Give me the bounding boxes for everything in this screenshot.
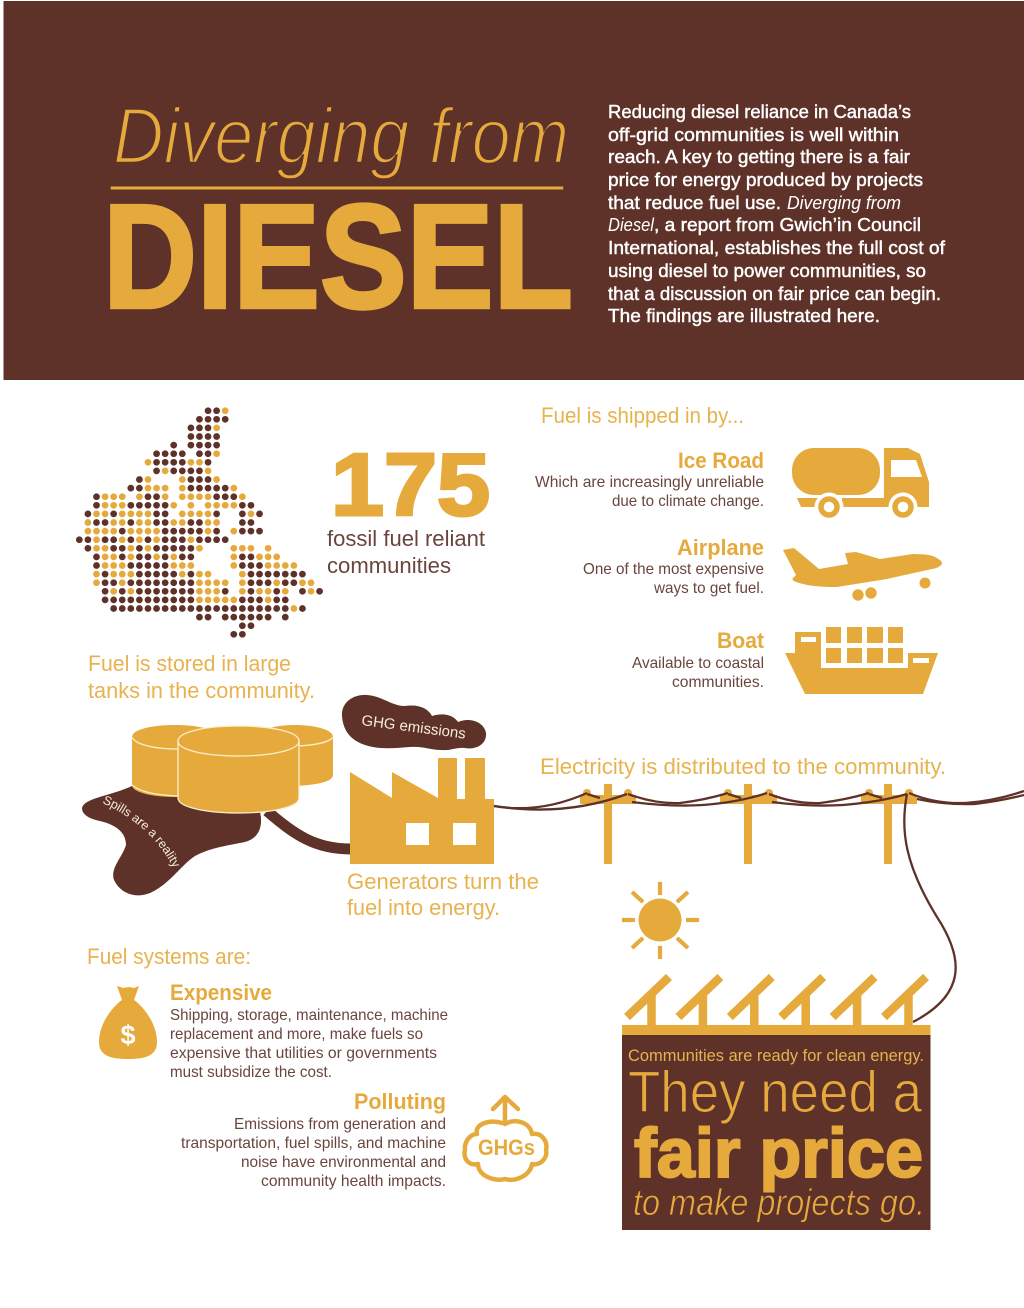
block: polluting: transportation, fuel spills, and machine [181, 1135, 446, 1152]
panel: call to action: Communities are ready for clean energy. [628, 1046, 924, 1065]
block: polluting: Emissions from generation and [234, 1116, 446, 1133]
fuel storage tanks [132, 725, 333, 813]
block: airplane: One of the most expensive [583, 561, 764, 578]
power lines [494, 791, 1024, 1022]
title rule [111, 186, 563, 190]
cloud: GHG emissions: GHG emissions [360, 712, 467, 743]
block: boat: Available to coastal [632, 655, 764, 672]
block: ice road: Ice Road [678, 448, 764, 473]
label: fuel is stored: Fuel is stored in large [88, 651, 291, 676]
icon: GHGs cloud [465, 1097, 546, 1180]
label: fuel is stored: tanks in the community. [88, 678, 315, 703]
intro text block: that a discussion on fair price can begin. [608, 283, 941, 304]
label: generators: fuel into energy. [347, 895, 500, 920]
intro text block: Diverging from [787, 192, 901, 213]
icon: GHGs cloud: GHGs [478, 1135, 535, 1160]
intro text block: Reducing diesel reliance in Canada’s [608, 101, 911, 122]
block: polluting: Polluting [354, 1089, 446, 1114]
intro text block [608, 101, 946, 326]
intro text block: using diesel to power communities, so [608, 260, 926, 281]
label: generators [347, 869, 539, 920]
spill caption: Spills are a reality [103, 796, 180, 866]
icon: generator factory [350, 758, 494, 864]
icon: airplane [783, 548, 942, 601]
cloud: GHG emissions [342, 695, 486, 750]
block: polluting: community health impacts. [261, 1173, 446, 1190]
panel: call to action: to make projects go. [633, 1182, 925, 1223]
intro text block: The findings are illustrated here. [608, 305, 880, 326]
icon: sun [622, 882, 699, 959]
block: airplane: Airplane [677, 535, 764, 560]
intro text block: , a report from Gwich’in Council [654, 214, 921, 235]
block: polluting [181, 1089, 446, 1190]
intro text block: International, establishes the full cost of [608, 237, 946, 258]
icon: money bag [99, 986, 157, 1059]
block: ice road [535, 448, 764, 510]
panel: call to action: They need a [628, 1060, 923, 1125]
block: expensive: replacement and more, make fuels so [170, 1026, 423, 1043]
stat: 175 fossil fuel reliant communities [327, 435, 490, 578]
block: expensive: Shipping, storage, maintenance, machine [170, 1007, 448, 1024]
block: polluting: noise have environmental and [241, 1154, 446, 1171]
label: fuel is stored [88, 651, 315, 703]
icon: money bag: $ [120, 1020, 136, 1050]
intro text block: reach. A key to getting there is a fair [608, 146, 910, 167]
block: ice road: due to climate change. [612, 493, 764, 510]
block: boat: communities. [672, 674, 764, 691]
oil spill [82, 786, 262, 896]
block: expensive: expensive that utilities or governments [170, 1045, 437, 1062]
panel: call to action [622, 1035, 930, 1230]
block: boat [632, 628, 765, 691]
block: airplane [583, 535, 764, 597]
panel: header [4, 1, 1024, 380]
stat: 175 fossil fuel reliant communities: 175 [331, 435, 490, 534]
power poles [580, 784, 917, 864]
title: DIESEL: DIESEL [103, 174, 573, 340]
stat: 175 fossil fuel reliant communities: fossil fuel reliant [327, 526, 485, 551]
panel: call to action: fair price [634, 1114, 923, 1192]
block: boat: Boat [717, 628, 765, 653]
intro text block: price for energy produced by projects [608, 169, 923, 190]
block: ice road: Which are increasingly unreliable [535, 474, 764, 491]
heading: fuel systems are: Fuel systems are: [87, 944, 251, 969]
label: electricity distributed: Electricity is distributed to the community. [540, 754, 946, 779]
block: expensive [170, 980, 448, 1081]
block: expensive: must subsidize the cost. [170, 1064, 332, 1081]
intro text block: Diesel [608, 214, 655, 235]
block: airplane: ways to get fuel. [653, 580, 764, 597]
stat: 175 fossil fuel reliant communities: communities [327, 553, 451, 578]
block: expensive: Expensive [170, 980, 272, 1005]
intro text block: off-grid communities is well within [608, 124, 899, 145]
solar panels [622, 977, 930, 1036]
icon: tanker truck [792, 448, 929, 522]
label: generators: Generators turn the [347, 869, 539, 894]
title: Diverging from: Diverging from [113, 91, 569, 180]
dot map of Canada [79, 411, 320, 634]
heading: fuel is shipped: Fuel is shipped in by... [541, 403, 744, 428]
intro text block: that reduce fuel use. [608, 192, 781, 213]
icon: container ship [785, 627, 938, 694]
pipe from tanks to generator [267, 811, 351, 849]
